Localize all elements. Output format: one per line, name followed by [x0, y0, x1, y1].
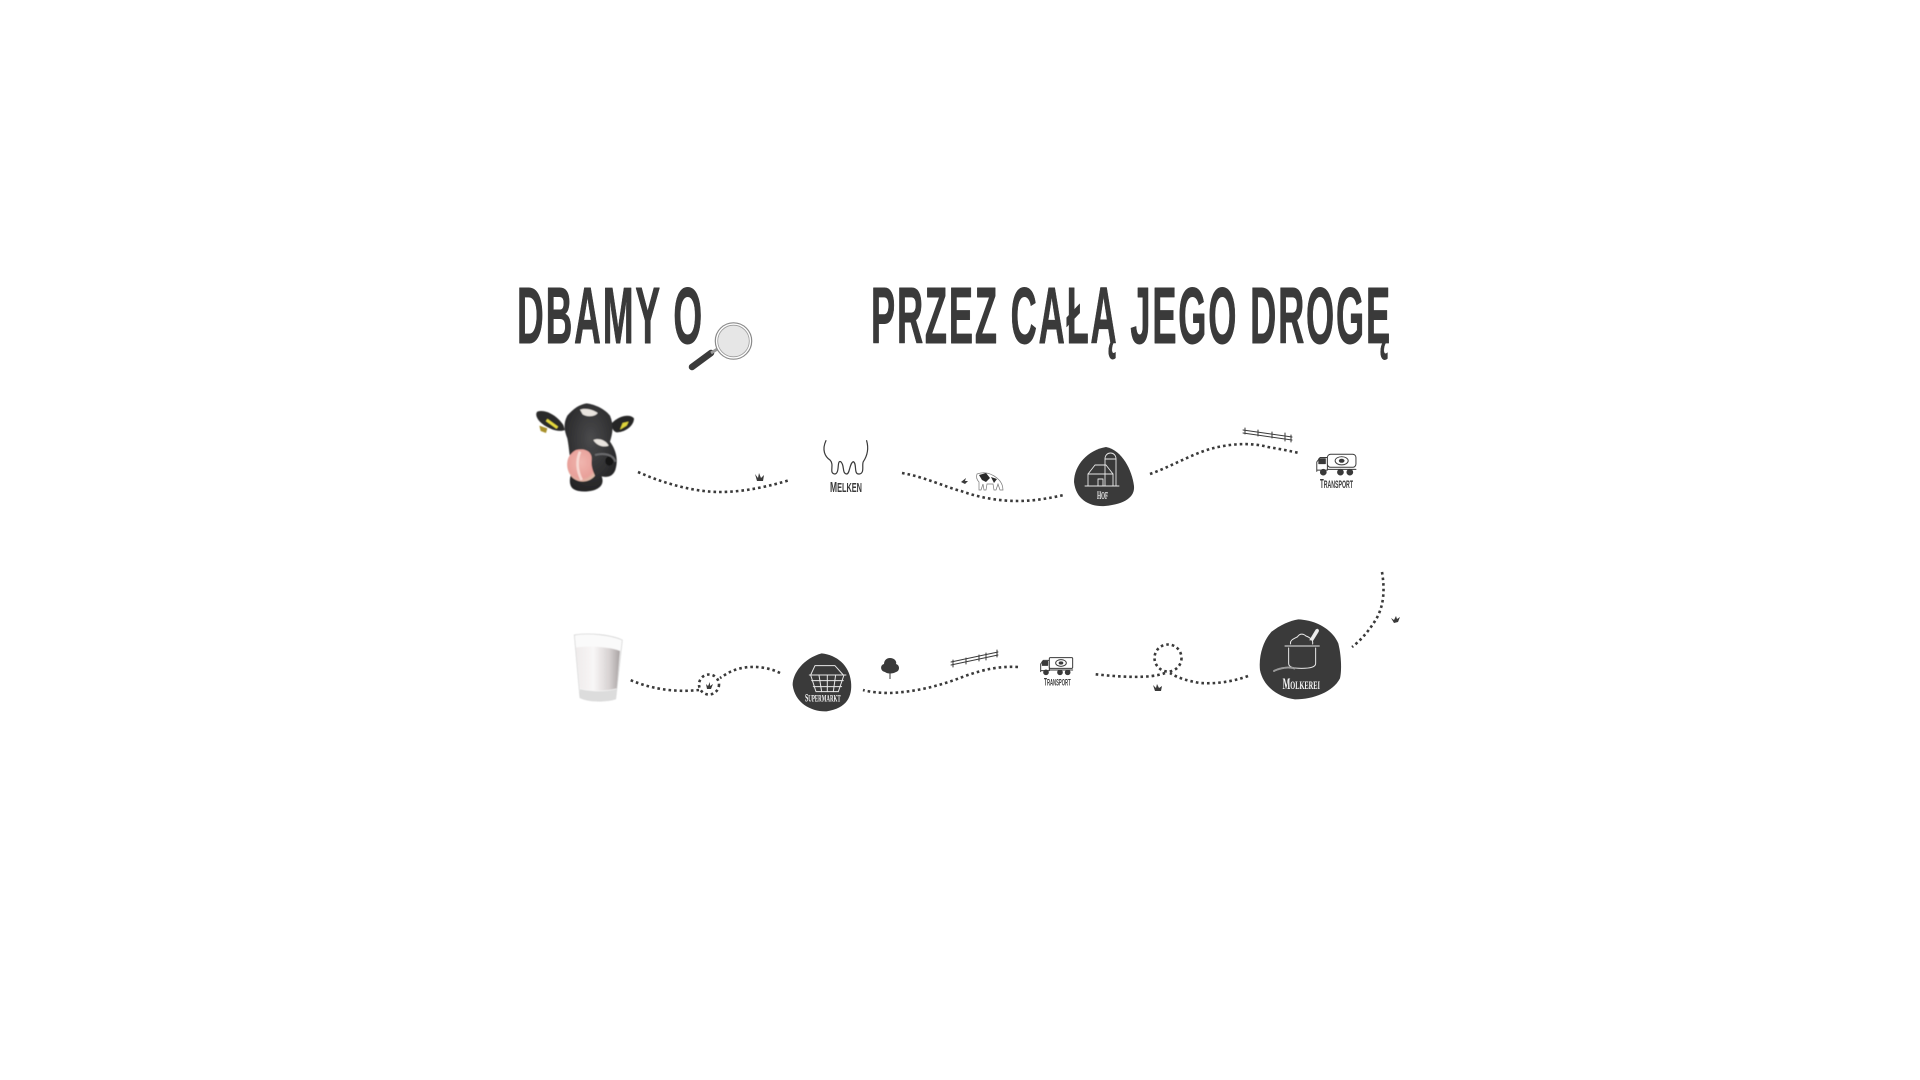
dotted path: transport to supermarket — [863, 667, 1018, 693]
dotted path: cow to milking — [638, 472, 790, 492]
dotted path: supermarket to glass with loop — [628, 667, 780, 694]
icon: grazing cow — [977, 473, 1003, 490]
blob — [1074, 447, 1134, 506]
icon: grass tuft — [1391, 616, 1400, 623]
step: Transport (top row) — [1317, 454, 1356, 491]
icon: barn — [1085, 453, 1119, 486]
icon: grass tuft — [706, 682, 713, 689]
label: Melken: MELKEN — [830, 479, 862, 496]
icon: grass tuft — [1153, 684, 1162, 691]
step: Melken — [824, 441, 868, 496]
step: Molkerei — [1260, 619, 1341, 699]
dotted path: dairy to transport with loop — [1093, 644, 1248, 683]
dotted path: milking to farm — [902, 473, 1064, 501]
icon: milk tanker — [1317, 454, 1356, 475]
icon: magnifying glass — [692, 323, 752, 367]
icon: fence — [1243, 428, 1292, 442]
step: Transport (bottom row): TRANSPORT — [1044, 677, 1071, 689]
blob — [1260, 619, 1341, 699]
label: Transport: TRANSPORT — [1320, 476, 1353, 491]
icon: glass of milk — [574, 634, 622, 701]
text: DBAMY O — [517, 271, 704, 360]
icon: pot with cream and spoon — [1274, 629, 1319, 671]
blob — [793, 653, 851, 711]
icon: udder — [824, 441, 868, 474]
icon: shopping basket — [809, 666, 846, 692]
step: Transport (bottom row) — [1041, 658, 1073, 689]
dotted path: right turn to dairy — [1352, 572, 1384, 647]
dotted path: farm to transport — [1150, 444, 1299, 474]
icon: grass tuft — [755, 473, 764, 481]
icon: fence — [951, 650, 998, 667]
label: Supermarkt: SUPERMARKT — [805, 692, 841, 704]
icon: tree — [881, 658, 899, 679]
label: Molkerei: MOLKEREI — [1283, 676, 1320, 693]
step: Supermarkt — [793, 653, 851, 711]
icon: cow head photo — [536, 403, 634, 491]
label: Hof: HOF — [1097, 488, 1108, 502]
icon: milk tanker — [1041, 658, 1073, 675]
step: Hof — [1074, 447, 1134, 506]
icon: grass tuft — [961, 478, 968, 484]
